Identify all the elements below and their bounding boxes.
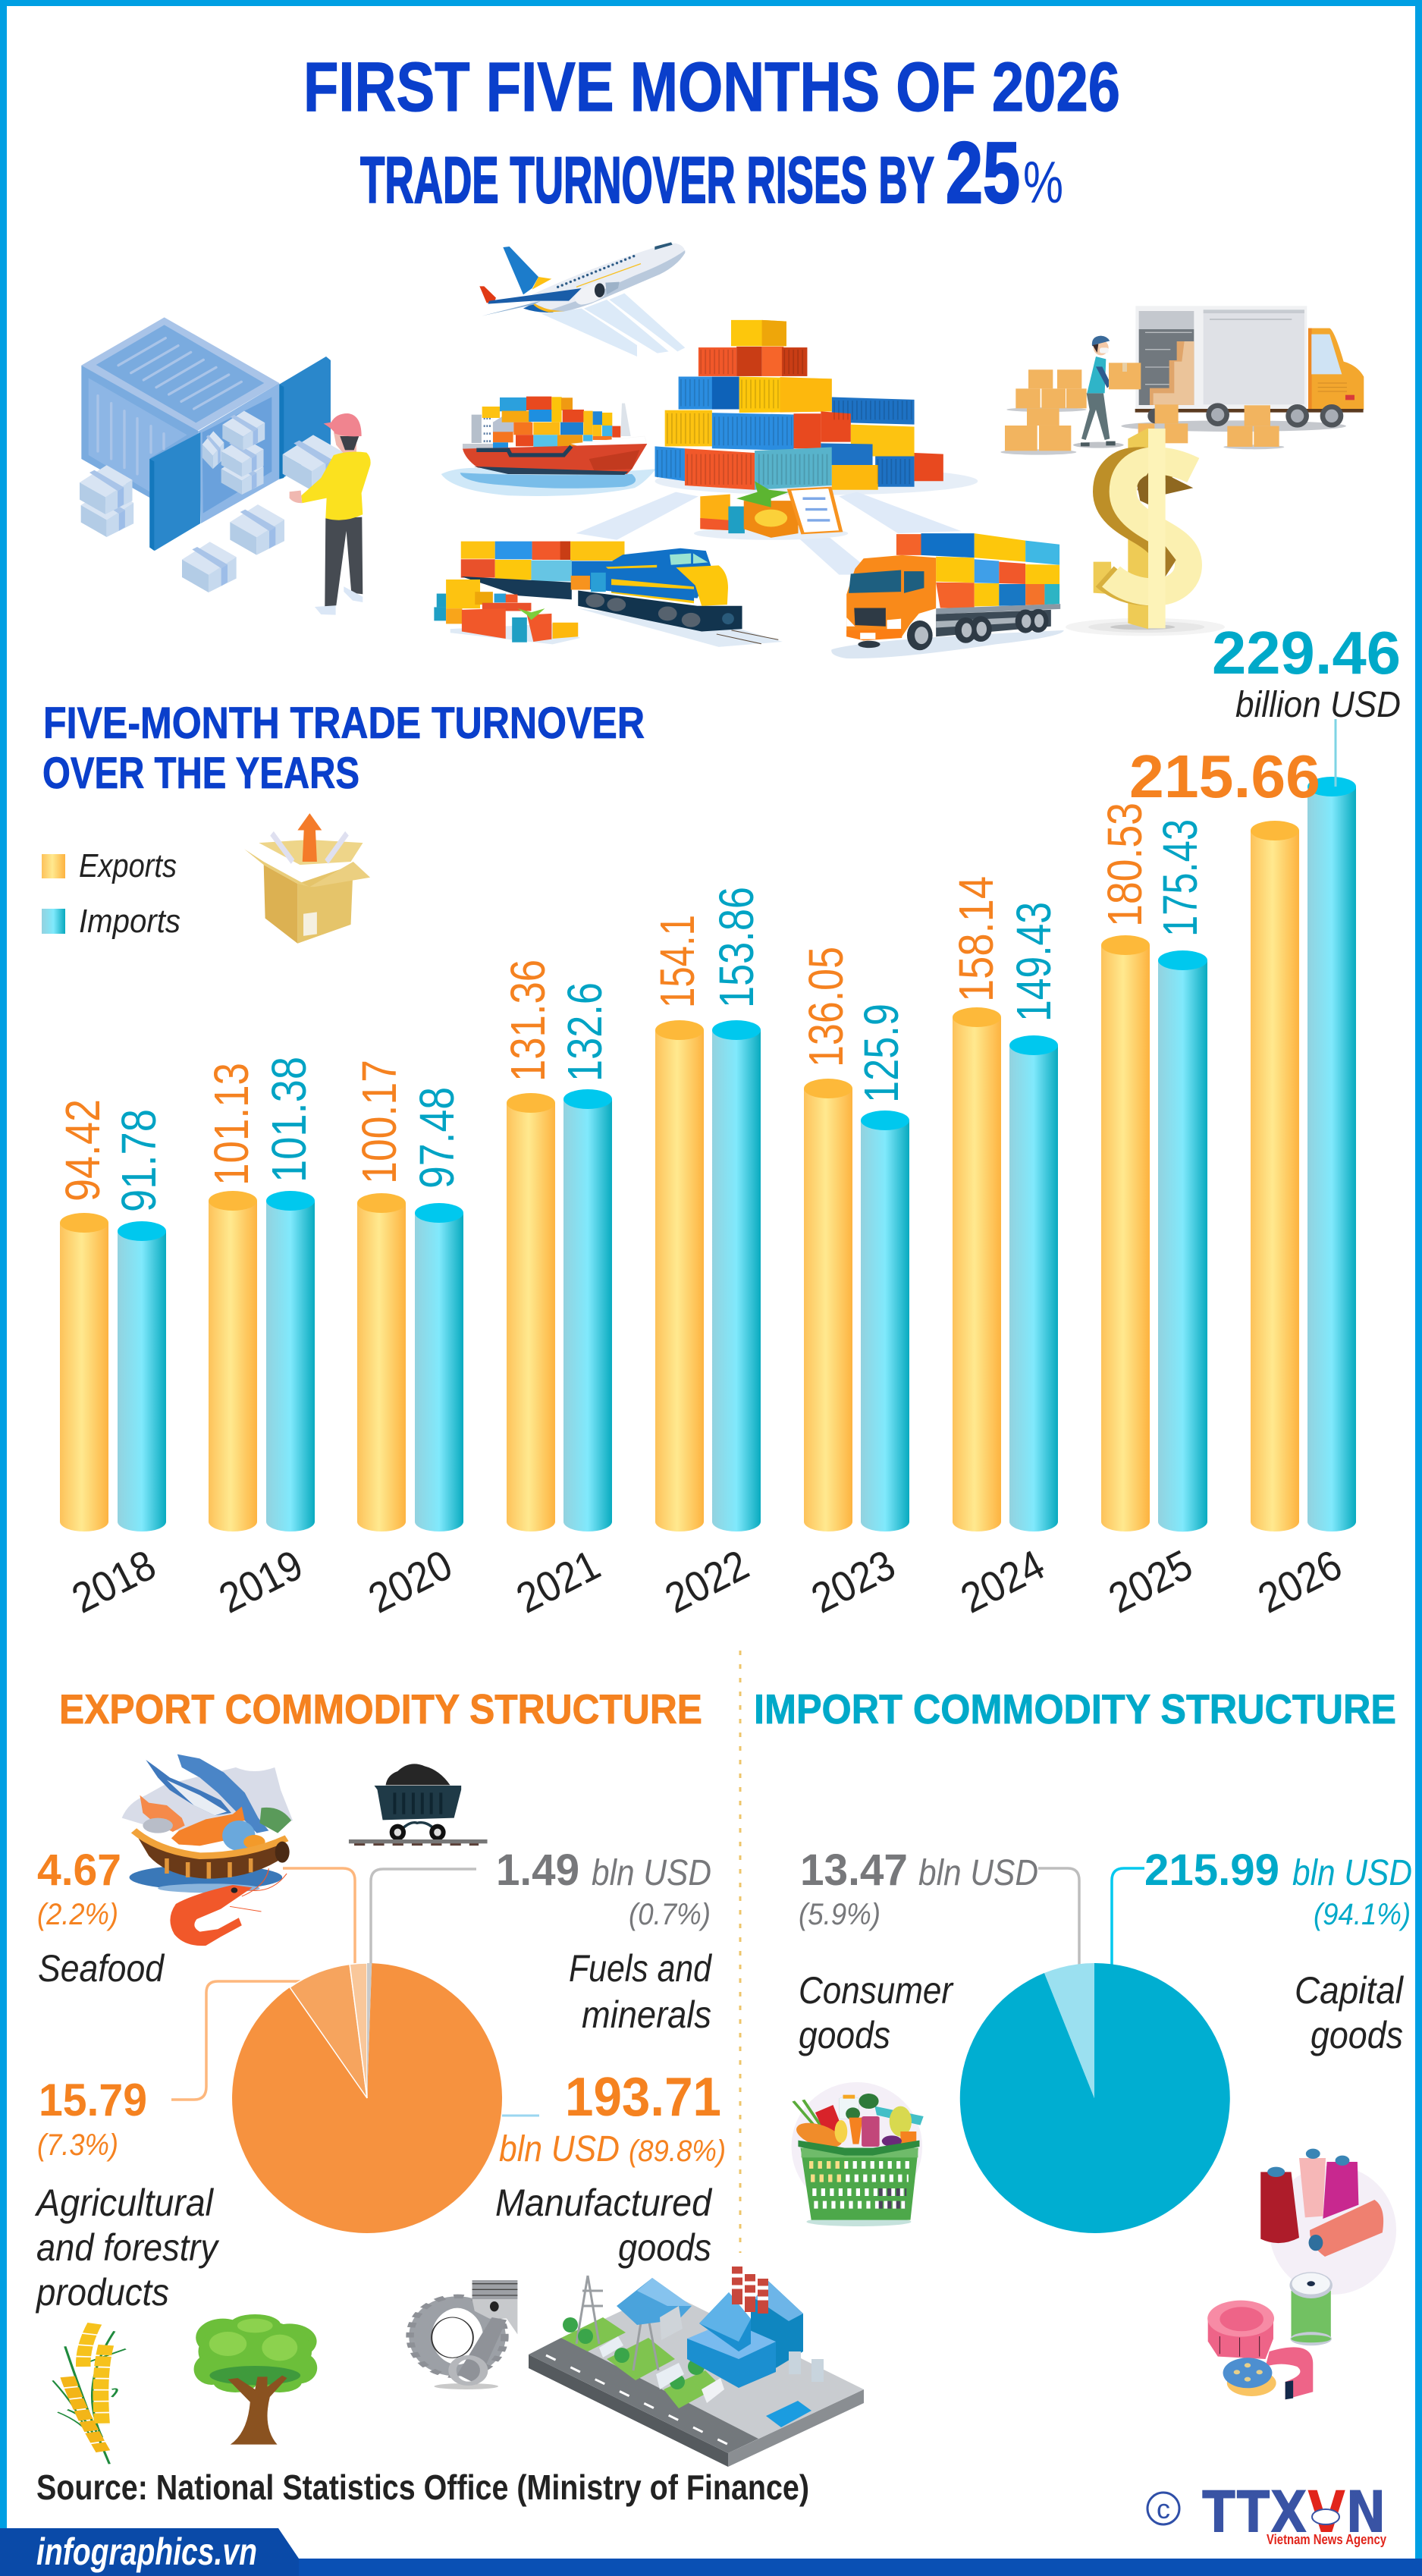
export value labels xyxy=(55,803,1152,1202)
value: capital goods: goods xyxy=(1311,2014,1403,2056)
fuels leader xyxy=(371,1869,476,1964)
value: fuels and minerals xyxy=(496,1846,713,2036)
title figure 25: 25 xyxy=(946,125,1020,221)
icon: aeroplane with trails xyxy=(479,242,685,357)
icon: container ship xyxy=(441,397,656,496)
logo: TTXVN: TTXVN xyxy=(1202,2478,1386,2546)
value: fuels and minerals: 1.49 xyxy=(496,1846,579,1895)
import value labels: 132.6 xyxy=(557,982,612,1082)
year axis labels: 2024 xyxy=(953,1541,1052,1622)
export value labels: 154.1 xyxy=(650,915,705,1008)
value: consumer goods: Consumer xyxy=(799,1969,954,2012)
bars 2021 xyxy=(507,1089,612,1531)
value: fuels and minerals: (0.7%) xyxy=(629,1898,711,1931)
value: agricultural and forestry products: and forestry xyxy=(36,2226,220,2269)
value: capital goods: 215.99 xyxy=(1144,1846,1279,1895)
footer bar xyxy=(0,2528,1422,2576)
import value labels: 125.9 xyxy=(854,1004,909,1103)
year axis labels: 2020 xyxy=(361,1541,460,1622)
agriculture leader xyxy=(171,1981,303,2100)
import value labels: 91.78 xyxy=(111,1109,166,1212)
icon: grocery basket xyxy=(789,2082,924,2226)
value: manufactured goods: goods xyxy=(618,2226,711,2269)
icon: gold dollar sign xyxy=(1066,428,1225,636)
bars 2019 xyxy=(209,1191,315,1531)
import value labels: 153.86 xyxy=(709,887,764,1008)
legend label: imports: Imports xyxy=(79,903,180,940)
export value labels: 131.36 xyxy=(501,960,555,1082)
value: seafood xyxy=(37,1846,165,1990)
icon: goods basket and clipboard xyxy=(694,481,848,540)
icon: coal cart on rail xyxy=(349,1764,488,1845)
leader line to 2026 imports bar xyxy=(1335,719,1336,787)
year axis labels xyxy=(64,1541,1349,1622)
icon: seafood basket xyxy=(122,1755,293,1946)
copyright mark xyxy=(1147,2493,1179,2524)
year axis labels: 2026 xyxy=(1251,1541,1349,1622)
value: fuels and minerals: Fuels and xyxy=(569,1947,713,1990)
highlighted value: 2026 imports: 229.46 xyxy=(1212,619,1401,686)
year axis labels: 2021 xyxy=(509,1541,607,1622)
value: agricultural and forestry products: products xyxy=(35,2271,169,2314)
value: manufactured goods: bln USD xyxy=(499,2129,620,2169)
value: capital goods xyxy=(1144,1846,1412,2056)
export value labels: 136.05 xyxy=(799,947,853,1067)
bars 2025 xyxy=(1101,935,1207,1531)
icon: light beams xyxy=(576,492,962,575)
value: consumer goods xyxy=(799,1846,1038,2056)
value: agricultural and forestry products: 15.79 xyxy=(39,2075,147,2125)
icon: industrial park xyxy=(529,2267,864,2467)
legend swatch: imports xyxy=(42,909,65,934)
legend swatch: exports xyxy=(42,854,65,878)
value: seafood: (2.2%) xyxy=(37,1898,118,1931)
icon: rice stalks xyxy=(53,2323,126,2464)
value: seafood: 4.67 xyxy=(37,1846,121,1895)
panel: import commodity structure xyxy=(754,1685,1412,2399)
logo: TTXVN: Vietnam News Agency xyxy=(1267,2532,1386,2547)
value: consumer goods: (5.9%) xyxy=(799,1898,881,1931)
value: agricultural and forestry products: (7.3%) xyxy=(37,2128,118,2162)
consumer goods leader xyxy=(1038,1868,1079,1965)
import value labels: 175.43 xyxy=(1153,819,1207,937)
value: manufactured goods xyxy=(495,2067,726,2269)
icon: delivery truck with worker and boxes xyxy=(1000,306,1364,455)
import value labels: 97.48 xyxy=(410,1087,464,1189)
bars 2023 xyxy=(804,1079,909,1531)
icon: open box with arrow xyxy=(244,813,370,944)
icon: tree xyxy=(194,2314,317,2445)
bars 2022 xyxy=(655,1020,761,1531)
title xyxy=(303,49,1120,221)
export value labels: 158.14 xyxy=(949,876,1003,1002)
icon: shipping container with worker xyxy=(80,317,371,615)
manufactured leader xyxy=(502,2115,539,2116)
legend xyxy=(42,847,180,940)
heading line 2: OVER THE YEARS xyxy=(42,749,359,798)
year axis labels: 2022 xyxy=(658,1541,756,1622)
value: capital goods: (94.1%) xyxy=(1314,1898,1411,1931)
icon: gear and piston xyxy=(410,2280,517,2389)
value: consumer goods: bln USD xyxy=(918,1853,1038,1893)
value: manufactured goods: Manufactured xyxy=(495,2182,713,2224)
export value labels: 180.53 xyxy=(1097,803,1152,927)
unit: billion USD: billion USD xyxy=(1235,685,1401,725)
icon: thread spools, tape and button xyxy=(1207,2149,1396,2399)
import value labels xyxy=(111,819,1207,1212)
bars 2018 xyxy=(60,1213,166,1531)
value: consumer goods: goods xyxy=(799,2014,890,2056)
export pie chart xyxy=(232,1963,502,2233)
import value labels: 149.43 xyxy=(1006,902,1061,1022)
import pie chart xyxy=(960,1963,1230,2233)
title line 2: TRADE TURNOVER RISES BY xyxy=(360,144,934,217)
icon: container truck xyxy=(831,533,1064,658)
bars 2026 xyxy=(1251,777,1356,1531)
title line 1: FIRST FIVE MONTHS OF 2026 xyxy=(303,49,1120,126)
import value labels: 101.38 xyxy=(262,1057,316,1183)
export heading: EXPORT COMMODITY STRUCTURE xyxy=(59,1685,702,1733)
value: fuels and minerals: bln USD xyxy=(592,1853,711,1893)
export value labels: 94.42 xyxy=(55,1099,110,1202)
value: agricultural and forestry products xyxy=(34,2075,220,2314)
heading line 1: FIVE-MONTH TRADE TURNOVER xyxy=(43,699,645,748)
year axis labels: 2025 xyxy=(1101,1541,1200,1622)
export value labels: 101.13 xyxy=(204,1063,259,1186)
legend label: exports: Exports xyxy=(79,847,177,884)
copyright mark: c xyxy=(1157,2493,1170,2524)
export value labels: 100.17 xyxy=(352,1060,407,1184)
icon: stacked containers xyxy=(655,320,978,495)
title percent sign: % xyxy=(1023,149,1063,215)
icon: freight train xyxy=(434,542,783,647)
bars 2024 xyxy=(953,1007,1058,1531)
value: capital goods: Capital xyxy=(1295,1969,1405,2012)
heading: five-month trade turnover xyxy=(42,699,645,798)
year axis labels: 2018 xyxy=(64,1541,163,1622)
value: manufactured goods: (89.8%) xyxy=(629,2135,726,2168)
capital goods leader xyxy=(1112,1868,1144,1965)
footer site name: infographics.vn xyxy=(36,2530,257,2573)
value: agricultural and forestry products: Agricultural xyxy=(34,2182,215,2224)
bars 2020 xyxy=(357,1193,463,1531)
year axis labels: 2019 xyxy=(212,1541,310,1622)
bar chart xyxy=(55,619,1401,1622)
value: fuels and minerals: minerals xyxy=(582,1993,711,2036)
highlighted value: 2026 exports: 215.66 xyxy=(1129,743,1320,810)
value: seafood: Seafood xyxy=(38,1947,165,1990)
value: manufactured goods: 193.71 xyxy=(565,2067,721,2128)
seafood leader xyxy=(283,1868,355,1965)
value: consumer goods: 13.47 xyxy=(800,1846,908,1895)
panel: export commodity structure xyxy=(34,1685,864,2467)
year axis labels: 2023 xyxy=(804,1541,902,1622)
source note: Source: National Statistics Office (Ministry of Finance) xyxy=(36,2468,809,2507)
